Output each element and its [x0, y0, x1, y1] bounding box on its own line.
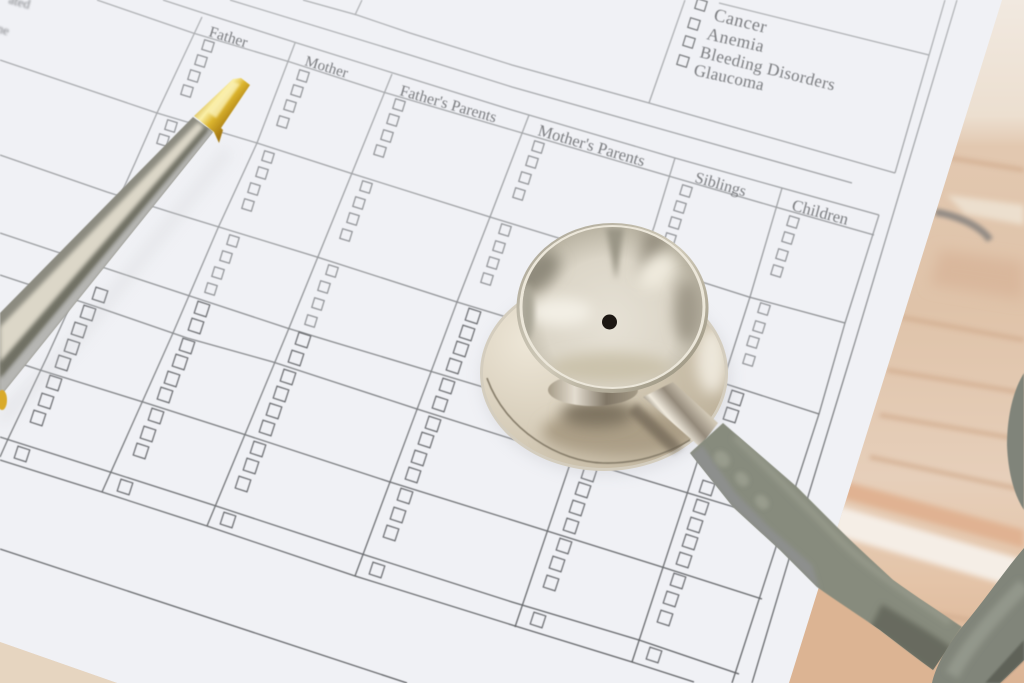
second tube, bottom right: [932, 373, 1024, 683]
pen gold band: [0, 390, 7, 410]
column headings: Father's Parents: [398, 83, 499, 126]
column headings: [207, 24, 851, 229]
metal stem: [628, 382, 718, 454]
pen: [0, 78, 250, 430]
bell rim and dish: [507, 223, 708, 393]
condition checklist: Cancer: [712, 4, 769, 37]
pen gold tip: [194, 78, 250, 143]
condition checklist: [677, 0, 837, 94]
checkboxes: lower rows: [14, 287, 744, 663]
column headings: Mother's Parents: [536, 121, 647, 170]
pen barrel: [0, 117, 213, 400]
bell neck: [548, 374, 638, 406]
tube moulded bumps: [714, 451, 768, 509]
bell centre hole: [602, 314, 617, 330]
column headings: Siblings: [693, 170, 748, 200]
diaphragm drum: [480, 304, 728, 471]
condition checklist: Anemia: [705, 23, 767, 56]
condition checklist: Glaucoma: [692, 60, 766, 94]
column headings: Mother: [303, 54, 350, 82]
cut-off text at top left: [0, 0, 33, 38]
coiled tube at right edge: [1007, 373, 1024, 510]
stethoscope chest piece: [480, 223, 732, 476]
column headings: Father: [207, 24, 250, 52]
checkboxes: upper rows: [157, 40, 799, 366]
rubber tubing: [690, 423, 962, 675]
column headings: Children: [790, 196, 851, 229]
condition checklist: Bleeding Disorders: [698, 42, 837, 94]
